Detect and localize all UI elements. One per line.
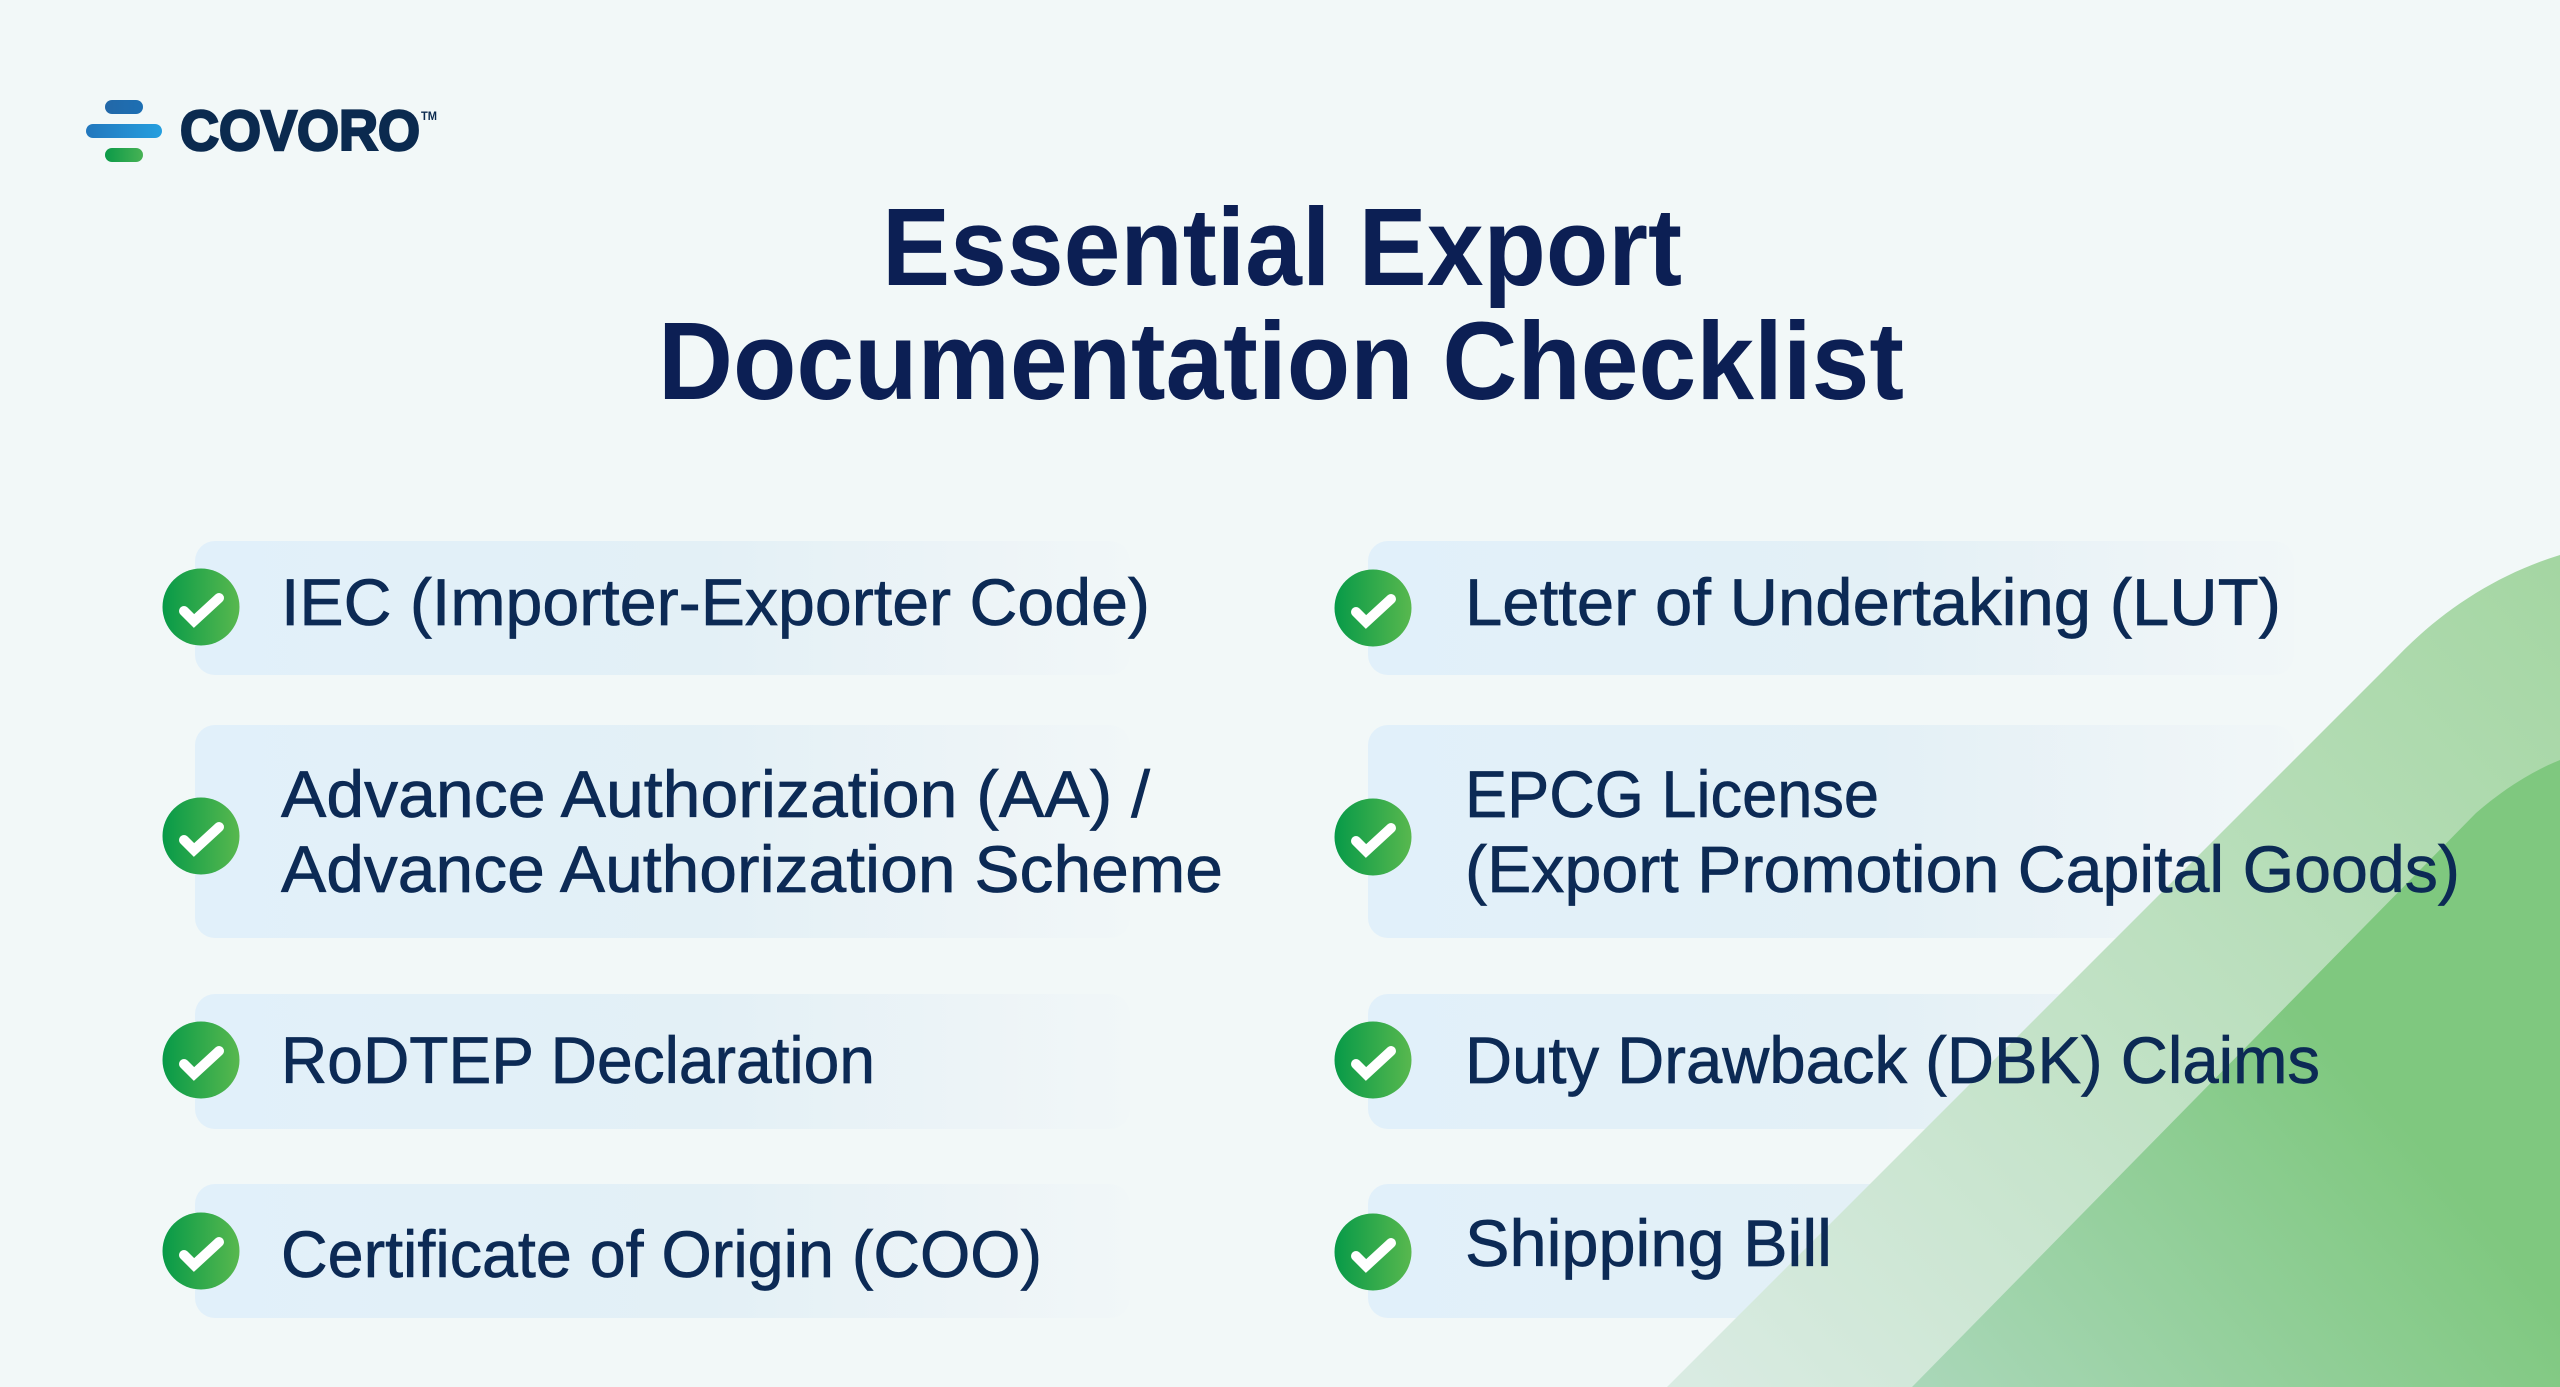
logo wordmark: COVORO [180,99,420,163]
icon: check [162,1212,240,1290]
item: Advance Authorization: Advance Authorization Scheme [281,832,1223,906]
item: Duty Drawback: Duty Drawback (DBK) Claims [1465,1023,2320,1097]
item: Advance Authorization: Advance Authorization (AA) / [281,757,1151,831]
title: Documentation Checklist [658,300,1904,423]
icon: check [162,1022,240,1098]
icon: check [162,798,240,874]
icon: check [1334,1214,1412,1290]
panel: left column item backgrounds [195,541,1130,1318]
icon: check [162,568,240,646]
decorative green wave: outer [1667,555,2560,1387]
panel: right column item backgrounds [1368,541,2294,1318]
title: Essential Export [882,186,1682,309]
title [658,186,1904,423]
icon: check [1334,1022,1412,1098]
logo [86,99,437,163]
icon: check [1334,798,1412,876]
icon: check [1334,570,1412,646]
item: Shipping Bill: Shipping Bill [1465,1206,1832,1280]
item: Advance Authorization [162,757,1223,906]
item: IEC: IEC (Importer-Exporter Code) [281,565,1150,639]
item: EPCG: (Export Promotion Capital Goods) [1465,832,2460,906]
trademark: TM [421,109,437,123]
item: Shipping Bill [1334,1206,1832,1290]
item: EPCG: EPCG License [1465,757,1879,831]
decorative green wave: inner [1912,760,2560,1387]
item: LUT: Letter of Undertaking (LUT) [1465,565,2281,639]
logo mark [86,100,162,162]
item: EPCG [1334,757,2460,906]
item: RoDTEP: RoDTEP Declaration [281,1023,875,1097]
item: Certificate of Origin: Certificate of Origin (COO) [281,1217,1042,1291]
